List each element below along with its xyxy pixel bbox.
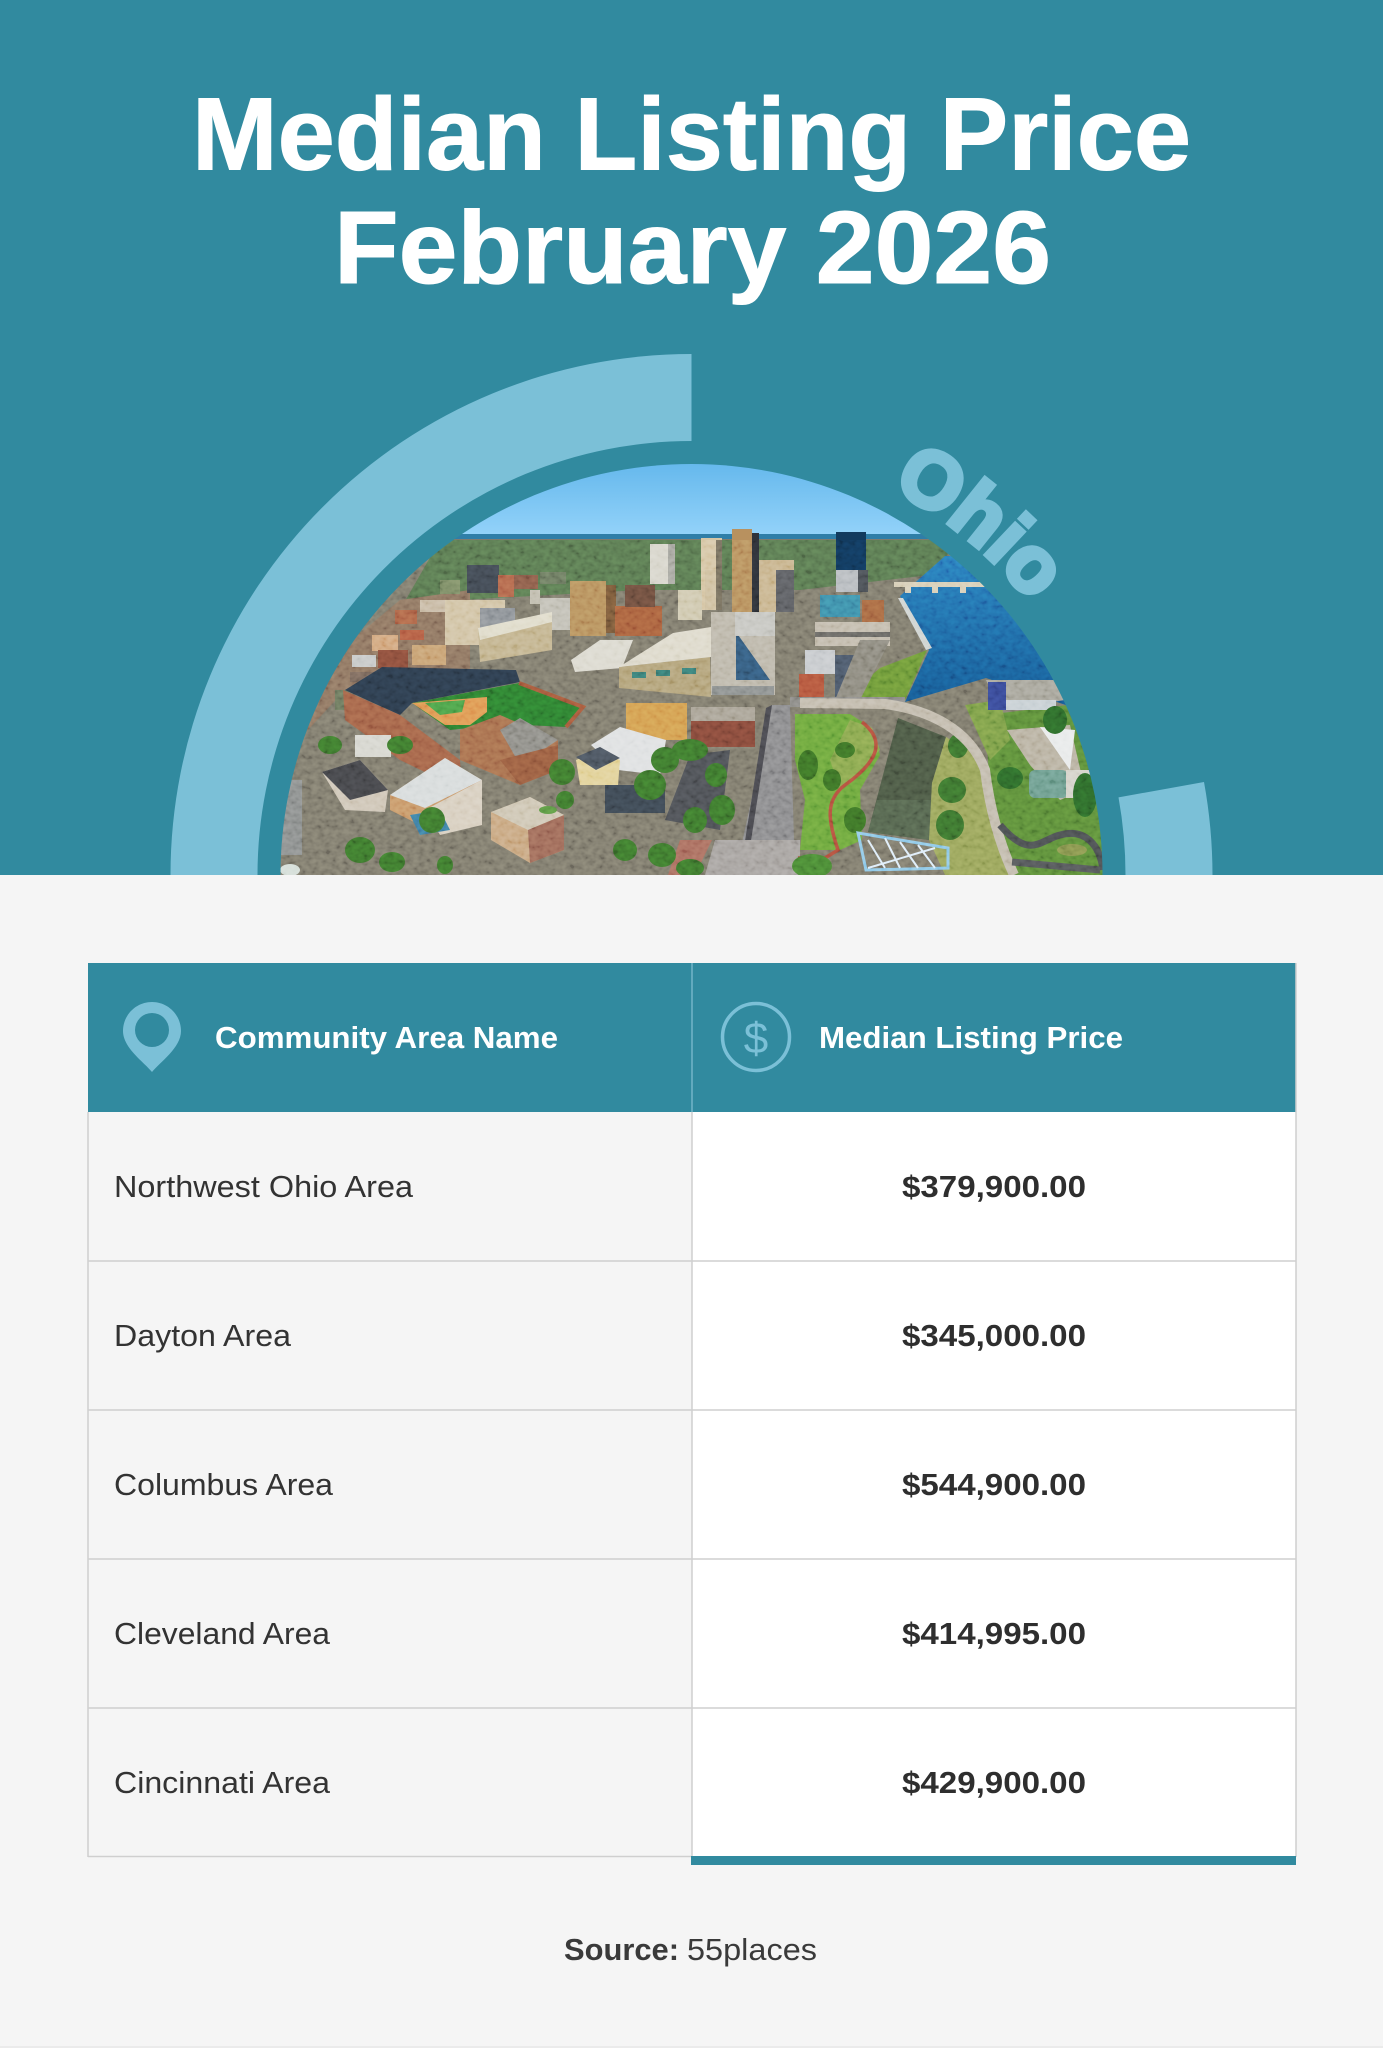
museum [1007, 725, 1096, 800]
header label: community area name: Community Area Name [215, 1020, 558, 1055]
downtown blocks [576, 703, 755, 813]
row: Dayton Area [114, 1318, 1086, 1353]
source line [564, 1932, 817, 1967]
dock [898, 598, 932, 650]
river [900, 556, 1066, 705]
ballpark brick facade [343, 690, 460, 772]
row: Cincinnati Area: Cincinnati Area [114, 1765, 331, 1800]
row: Cincinnati Area [114, 1765, 1086, 1800]
city blocks mid-right [799, 640, 890, 700]
convention centre [571, 627, 711, 697]
title [192, 76, 1191, 305]
riverfront trees [862, 650, 927, 700]
table bottom accent bar [691, 1856, 1296, 1865]
title: February 2026 [334, 190, 1051, 305]
decorative ring: large arc [170, 354, 692, 875]
source line: 55places [687, 1932, 817, 1967]
east office building [986, 680, 1065, 710]
icon: dollar coin [722, 1004, 790, 1070]
row: Dayton Area: $345,000.00 [902, 1318, 1086, 1353]
photo: aerial view of Toledo skyline [270, 460, 1110, 879]
canal [868, 718, 946, 840]
header panel [0, 0, 1383, 875]
street crossing [792, 854, 832, 875]
curved label: Ohio: Ohio [901, 448, 1056, 595]
row: Northwest Ohio Area: $379,900.00 [902, 1169, 1086, 1204]
decorative ring: small arc [1118, 782, 1212, 875]
street trees [318, 736, 735, 877]
row: Columbus Area [114, 1467, 1086, 1502]
title: Median Listing Price [192, 76, 1191, 192]
table [88, 963, 1296, 1865]
table grid [88, 963, 1296, 1857]
table header row [88, 963, 1296, 1112]
header label: median listing price: Median Listing Price [819, 1020, 1123, 1055]
lower-left buildings [280, 735, 482, 855]
row: Cincinnati Area: $429,900.00 [902, 1765, 1086, 1800]
red warning track [519, 683, 583, 727]
ballpark infield [412, 697, 487, 725]
upper-left neighbourhood roofs [306, 572, 566, 731]
road: Water Street [790, 697, 905, 707]
brick warehouse [460, 715, 558, 785]
icon: location pin [123, 1002, 181, 1072]
row: Cleveland Area: $414,995.00 [902, 1616, 1086, 1651]
park path [798, 722, 876, 858]
steel truss bridge [858, 833, 948, 870]
park trees [798, 742, 866, 833]
row: Columbus Area: $544,900.00 [902, 1467, 1086, 1502]
hotel tower [711, 612, 775, 695]
ballpark stands [345, 667, 520, 715]
parking lot [665, 750, 730, 830]
row: Cleveland Area [114, 1616, 1086, 1651]
row: Dayton Area: Dayton Area [114, 1318, 292, 1353]
east bank greenery [929, 737, 1010, 875]
row: Cleveland Area: Cleveland Area [114, 1616, 331, 1651]
east lawn [988, 705, 1102, 875]
row: Northwest Ohio Area [114, 1169, 1086, 1204]
source line: Source: [564, 1932, 679, 1967]
main street [742, 705, 794, 840]
far skyline [445, 529, 890, 662]
arched road bridge [800, 703, 1014, 875]
east trees [997, 706, 1097, 817]
ballpark field [412, 683, 583, 730]
riverside park [795, 714, 880, 850]
row: Northwest Ohio Area: Northwest Ohio Area [114, 1169, 414, 1204]
icon: dollar coin: $ [744, 1014, 768, 1063]
roundabout road [1000, 825, 1103, 870]
tan corner building [491, 797, 564, 863]
row: Columbus Area: Columbus Area [114, 1467, 334, 1502]
price column background [692, 1112, 1296, 1856]
bridge over river [894, 582, 986, 593]
